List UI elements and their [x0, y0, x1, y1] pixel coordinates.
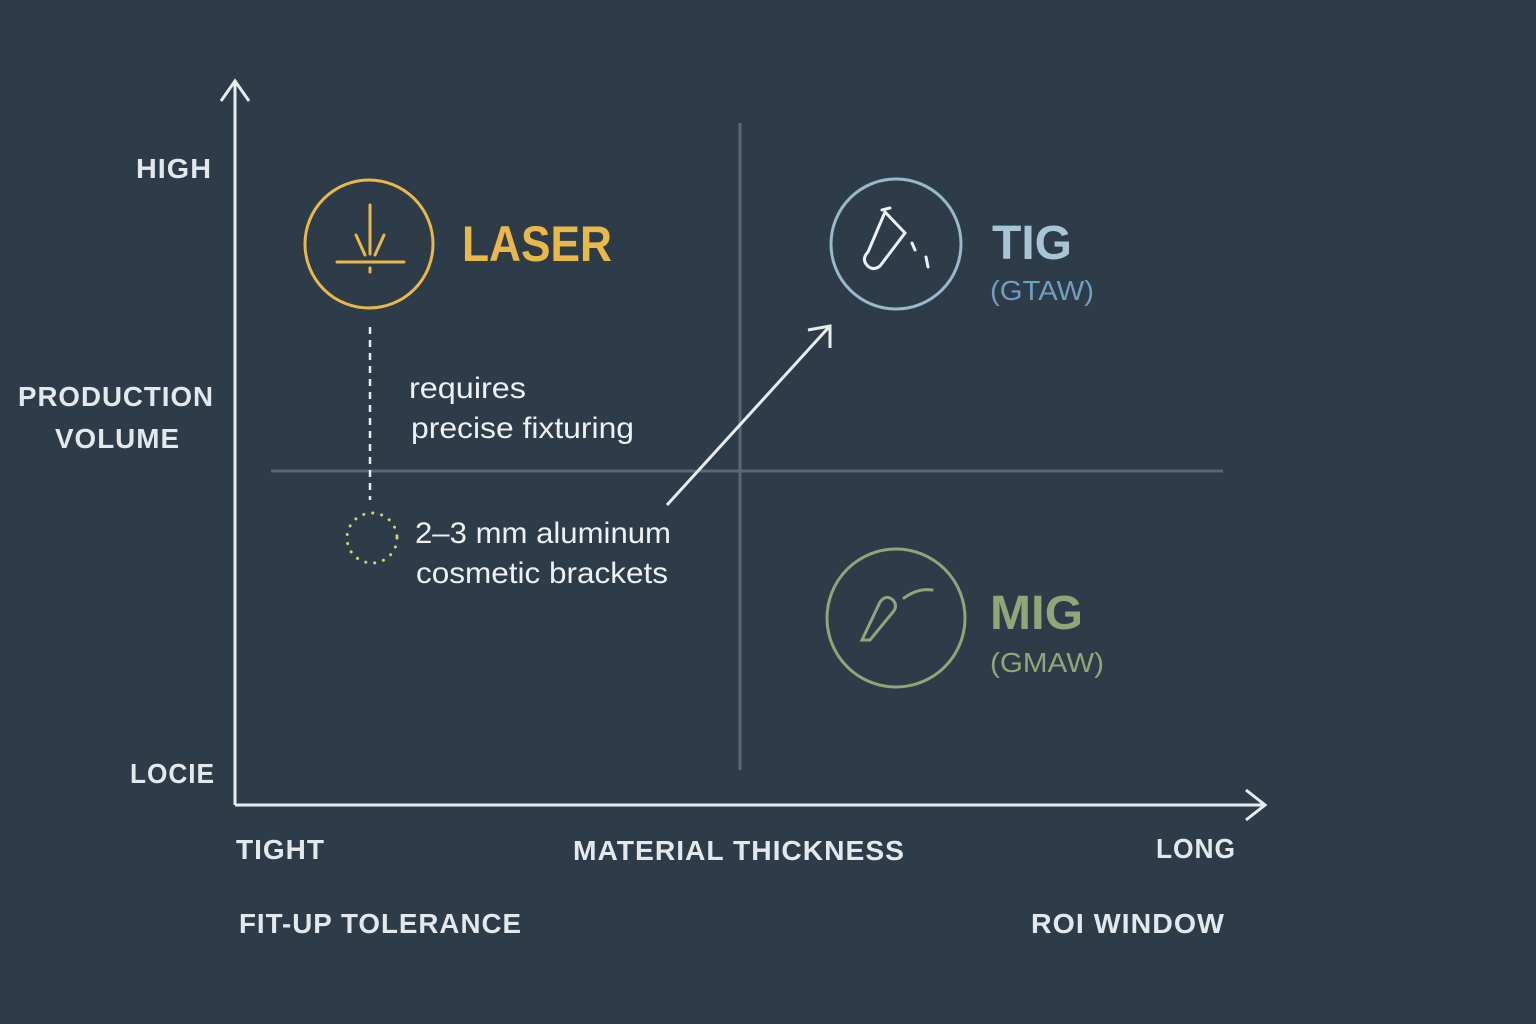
x axis labels: [236, 833, 1236, 939]
x axis labels: LONG: [1156, 833, 1236, 864]
arrow: [667, 326, 830, 505]
x axis labels: FIT-UP TOLERANCE: [239, 908, 522, 939]
note: aluminum: cosmetic brackets: [416, 557, 668, 590]
icon: dotted circle: [347, 513, 397, 563]
note: aluminum: 2–3 mm aluminum: [415, 517, 671, 550]
x axis labels: MATERIAL THICKNESS: [573, 835, 905, 866]
note: fixturing: precise fixturing: [411, 412, 634, 445]
y axis labels: [18, 153, 215, 789]
note: fixturing: [409, 372, 634, 445]
y axis labels: PRODUCTION: [18, 381, 214, 412]
heading: laser: LASER: [462, 216, 612, 272]
dotted connector: [369, 327, 371, 500]
x axis labels: TIGHT: [236, 834, 325, 865]
heading: tig: (GTAW): [990, 275, 1094, 306]
icon: tig: [831, 179, 961, 309]
y axis: [221, 80, 249, 805]
note: fixturing: requires: [409, 372, 526, 405]
heading: mig: [990, 587, 1104, 678]
heading: tig: [990, 217, 1094, 306]
x axis: [235, 790, 1265, 820]
heading: tig: TIG: [992, 217, 1072, 270]
heading: mig: MIG: [990, 587, 1083, 640]
y axis labels: LOCIE: [130, 758, 215, 789]
y axis labels: VOLUME: [55, 423, 180, 454]
heading: mig: (GMAW): [990, 647, 1104, 678]
y axis labels: HIGH: [136, 153, 212, 184]
x axis labels: ROI WINDOW: [1031, 908, 1225, 939]
note: aluminum: [415, 517, 671, 590]
icon: laser: [305, 180, 433, 308]
icon: mig: [827, 549, 965, 687]
